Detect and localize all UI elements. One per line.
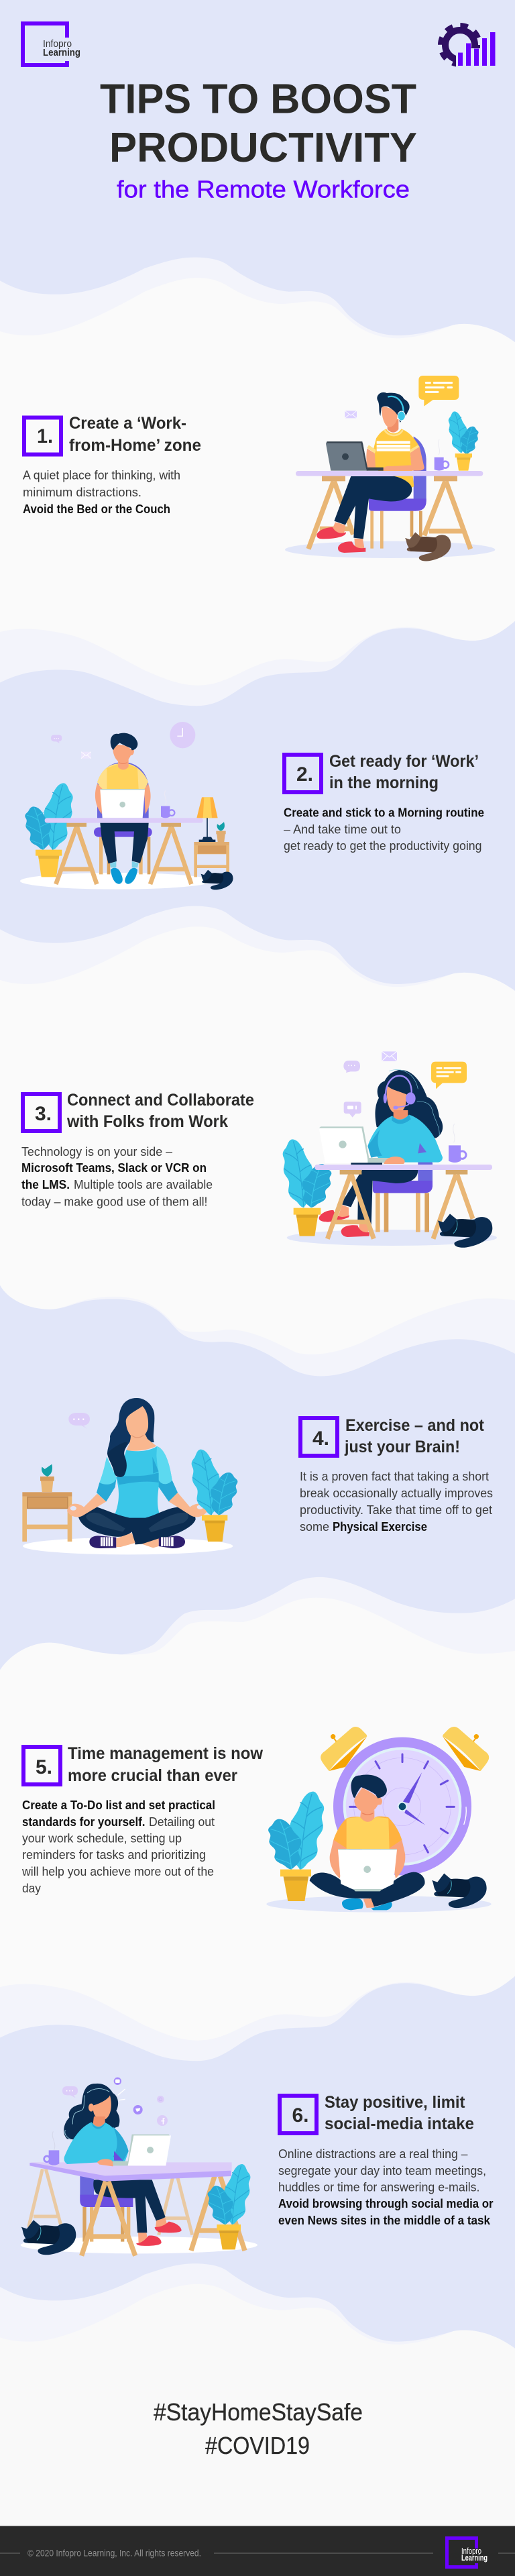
footer logo: Infopro xyxy=(461,2546,481,2556)
heading 1 xyxy=(69,414,201,455)
body 5: day xyxy=(22,1882,41,1895)
body 6: segregate your day into team meetings, xyxy=(278,2164,486,2178)
body 2 xyxy=(284,806,484,853)
title: PRODUCTIVITY xyxy=(109,125,417,171)
logo: Infopro Learning: Infopro xyxy=(43,38,72,50)
body 4: some xyxy=(300,1520,329,1534)
body 1: minimum distractions. xyxy=(23,486,141,499)
number badge 3: 3. xyxy=(35,1103,52,1125)
hashtags: #StayHomeStaySafe xyxy=(154,2398,363,2426)
number badge 6: 6. xyxy=(292,2104,308,2127)
body 5: standards for yourself. xyxy=(22,1815,145,1829)
heading 4 xyxy=(344,1416,485,1456)
body 5: your work schedule, setting up xyxy=(22,1831,182,1845)
footer xyxy=(0,2526,515,2576)
footer logo xyxy=(447,2538,488,2567)
body 6: even News sites in the middle of a task xyxy=(278,2214,491,2227)
illustration 3: woman with headset at desk xyxy=(283,1051,497,1248)
body 2: get ready to get the productivity going xyxy=(284,839,481,853)
body 1: A quiet place for thinking, with xyxy=(23,469,180,482)
heading 5 xyxy=(68,1744,264,1785)
number badge 2 xyxy=(284,755,321,792)
body 3: today – make good use of them all! xyxy=(21,1195,208,1209)
heading 1: Create a ‘Work- xyxy=(69,414,186,433)
number badge 4 xyxy=(300,1418,337,1456)
title xyxy=(100,76,417,171)
heading 3: with Folks from Work xyxy=(66,1112,228,1131)
body 4: break occasionally actually improves xyxy=(300,1487,493,1500)
logo: Infopro Learning xyxy=(23,23,80,65)
illustration 2: man working at desk facing front xyxy=(20,722,233,890)
body 3 xyxy=(21,1145,213,1209)
heading 5: Time management is now xyxy=(68,1744,264,1763)
subtitle: for the Remote Workforce xyxy=(117,176,410,203)
footer logo: Learning xyxy=(461,2553,488,2563)
illustration 6: woman at table with social media icons xyxy=(21,2078,258,2256)
panel: tip 3 xyxy=(21,1091,254,1209)
heading 2: Get ready for ‘Work’ xyxy=(329,752,479,771)
number badge 5 xyxy=(23,1747,60,1784)
hashtags xyxy=(154,2398,363,2459)
illustration 1: man at desk with laptop xyxy=(285,376,495,561)
panel: tip 6 xyxy=(278,2093,494,2227)
number badge 1 xyxy=(24,417,61,455)
body 4: Physical Exercise xyxy=(333,1520,427,1534)
heading 1: from-Home’ zone xyxy=(69,436,201,455)
body 2: – And take time out to xyxy=(284,822,401,836)
number badge 6 xyxy=(280,2096,317,2133)
number badge 1: 1. xyxy=(37,425,53,447)
body 5 xyxy=(21,1799,215,1895)
copyright: © 2020 Infopro Learning, Inc. All rights reserved. xyxy=(27,2548,201,2559)
number badge 4: 4. xyxy=(312,1428,329,1450)
heading 3: Connect and Collaborate xyxy=(67,1091,254,1110)
logo: Infopro Learning: Learning xyxy=(43,47,80,58)
heading 4: just your Brain! xyxy=(344,1438,460,1456)
heading 2 xyxy=(329,752,479,792)
title: TIPS TO BOOST xyxy=(100,76,416,122)
body 1: Avoid the Bed or the Couch xyxy=(23,502,170,516)
body 3: Technology is on your side – xyxy=(21,1145,172,1159)
illustration 4: woman meditating xyxy=(22,1398,237,1554)
heading 5: more crucial than ever xyxy=(68,1766,237,1785)
illustration 5: man with laptop in front of alarm clock xyxy=(266,1727,492,1913)
panel: tip 5 xyxy=(21,1744,264,1895)
number badge 2: 2. xyxy=(296,763,313,786)
body 1 xyxy=(23,469,180,516)
heading 4: Exercise – and not xyxy=(345,1416,485,1435)
body 5: will help you achieve more out of the xyxy=(21,1865,214,1878)
heading 2: in the morning xyxy=(329,773,439,792)
body 5: reminders for tasks and prioritizing xyxy=(22,1848,206,1862)
body 6 xyxy=(278,2147,494,2227)
panel: tip 2 xyxy=(284,752,484,853)
body 3: Multiple tools are available xyxy=(74,1178,213,1191)
heading 6: social-media intake xyxy=(325,2114,474,2133)
body 6: Avoid browsing through social media or xyxy=(278,2197,494,2210)
heading 3 xyxy=(66,1091,254,1131)
icon: gear with bar chart xyxy=(440,25,495,68)
hashtags: #COVID19 xyxy=(205,2432,310,2459)
body 5: Detailing out xyxy=(149,1815,215,1829)
heading 6: Stay positive, limit xyxy=(325,2093,465,2112)
body 6: Online distractions are a real thing – xyxy=(278,2147,468,2161)
body 4 xyxy=(300,1470,493,1534)
heading 6 xyxy=(325,2093,474,2133)
body 5: Create a To-Do list and set practical xyxy=(22,1799,215,1812)
body 3: the LMS. xyxy=(21,1178,70,1191)
number badge 5: 5. xyxy=(36,1756,52,1778)
number badge 3 xyxy=(23,1094,60,1131)
body 3: Microsoft Teams, Slack or VCR on xyxy=(21,1161,207,1175)
body 6: huddles or time for answering e-mails. xyxy=(278,2180,480,2194)
body 4: It is a proven fact that taking a short xyxy=(300,1470,489,1483)
body 4: productivity. Take that time off to get xyxy=(300,1503,492,1517)
body 2: Create and stick to a Morning routine xyxy=(284,806,484,820)
panel: tip 1 xyxy=(23,414,201,516)
panel: tip 4 xyxy=(300,1416,493,1534)
